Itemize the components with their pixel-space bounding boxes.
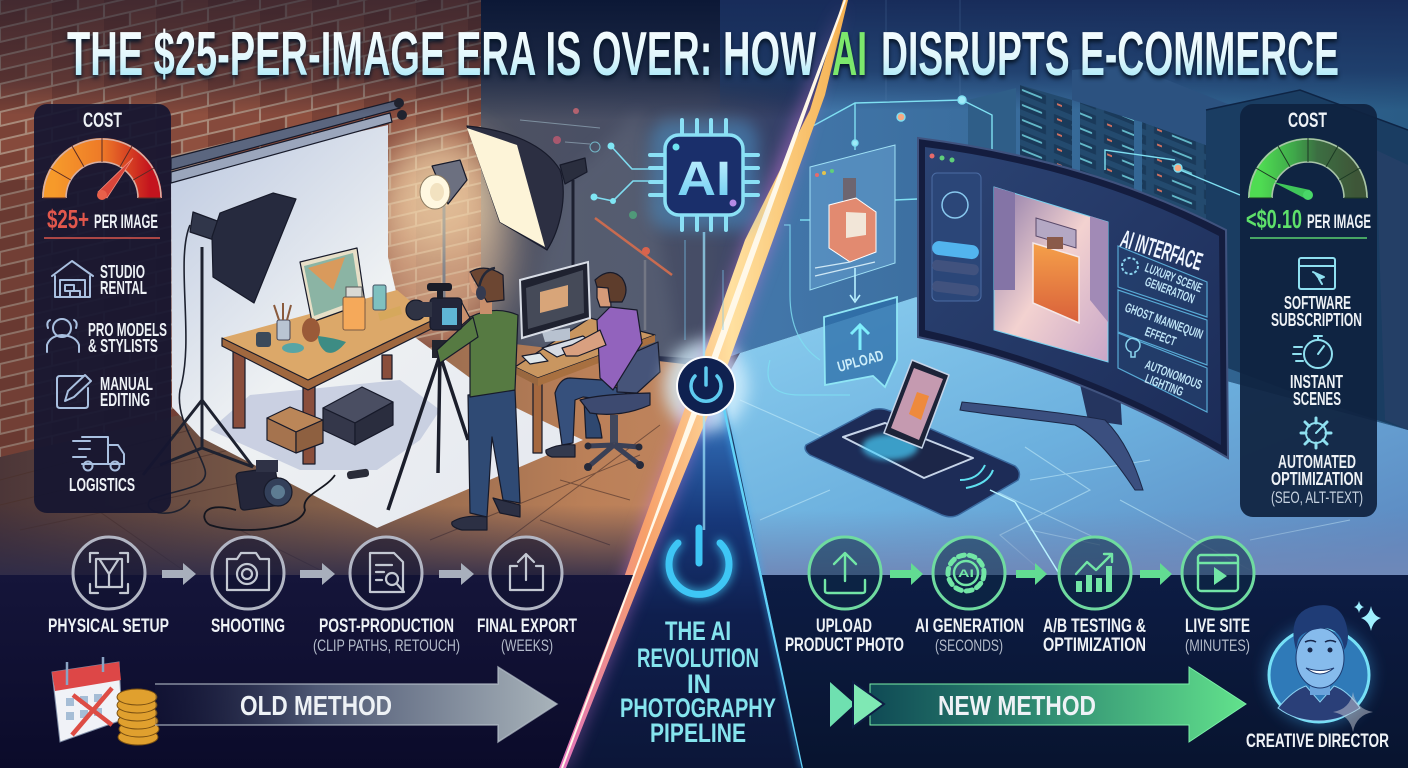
camera on floor	[204, 460, 369, 530]
interface options: LUXURY SCENE	[1143, 260, 1204, 295]
background: AI studio wall	[720, 0, 1408, 430]
old studio scene	[143, 98, 672, 530]
icon: AI chip: AI	[677, 153, 731, 206]
item: pro models and stylists: PRO MODELS	[88, 320, 167, 340]
item: pro models and stylists: & STYLISTS	[88, 336, 158, 356]
step: post-production: POST-PRODUCTION	[319, 616, 454, 637]
background: old studio floor	[0, 340, 735, 575]
title: AI	[832, 20, 867, 89]
step: live site	[1182, 537, 1254, 655]
cost heading: COST	[83, 109, 122, 132]
step: final export: FINAL EXPORT	[477, 616, 577, 637]
step: post-production: (CLIP PATHS, RETOUCH)	[313, 636, 460, 655]
item: instant scenes: SCENES	[1293, 389, 1341, 409]
arrow	[439, 563, 474, 585]
sidebar	[931, 173, 981, 301]
upload bubble: UPLOAD	[836, 347, 886, 376]
old pipeline	[48, 537, 577, 745]
step: shooting	[211, 537, 285, 637]
phone on charging pad	[805, 360, 1060, 575]
background lamp	[385, 135, 495, 300]
centre glow	[664, 340, 748, 432]
new method arrow	[830, 667, 1246, 742]
step: upload product photo: UPLOAD	[816, 616, 872, 637]
divider beam	[558, 0, 848, 768]
cost heading: COST	[1288, 109, 1327, 132]
interface options: EFFECT	[1143, 324, 1178, 349]
table	[222, 290, 433, 464]
item: pro models and stylists	[47, 319, 167, 356]
step: upload product photo	[785, 537, 904, 656]
step: live site: (MINUTES)	[1185, 636, 1250, 655]
step: live site: LIVE SITE	[1185, 616, 1250, 637]
icon: large power symbol	[669, 528, 729, 594]
centre text: IN	[687, 669, 711, 699]
icon: power button	[676, 356, 736, 416]
centre text: REVOLUTION	[637, 643, 759, 673]
icon: AI chip	[590, 120, 758, 230]
step: physical setup	[48, 537, 169, 637]
background: old studio wall	[0, 0, 850, 480]
interface options: GENERATION	[1143, 274, 1197, 306]
wall hud marks	[520, 108, 637, 219]
interface options: LIGHTING	[1143, 371, 1186, 399]
step: AI generation: (SECONDS)	[935, 636, 1003, 655]
curved monitor	[918, 138, 1228, 458]
step: final export: (WEEKS)	[501, 636, 553, 655]
item: studio rental	[52, 261, 147, 298]
backdrop paper	[171, 125, 583, 528]
arrow	[1016, 563, 1047, 585]
interface options	[1117, 225, 1207, 412]
server racks	[968, 65, 1408, 430]
arrow	[1140, 563, 1172, 585]
step: final export	[477, 537, 577, 655]
item: manual editing	[57, 374, 153, 410]
storage case and box	[267, 387, 393, 453]
interface options: AUTONOMOUS	[1143, 357, 1205, 392]
editor at desk	[515, 262, 660, 471]
arrow	[890, 563, 923, 585]
backdrop roller	[171, 98, 407, 183]
step: upload product photo: PRODUCT PHOTO	[785, 635, 904, 656]
creative director avatar	[1246, 601, 1389, 752]
interface options: AI INTERFACE	[1117, 225, 1206, 276]
gauge: high cost	[43, 138, 161, 200]
centre text	[620, 616, 776, 748]
title: THE $25-PER-IMAGE ERA IS OVER: HOW	[67, 20, 816, 89]
step: shooting: SHOOTING	[211, 616, 285, 637]
photographer and tripod	[388, 268, 520, 530]
step: A/B testing: A/B TESTING &	[1043, 616, 1146, 637]
price	[1246, 204, 1371, 234]
item: automated optimization: AUTOMATED	[1278, 452, 1356, 472]
panel: old method cost	[34, 104, 171, 513]
item: automated optimization	[1271, 418, 1363, 507]
centre text: PHOTOGRAPHY	[620, 693, 776, 723]
item: software subscription: SOFTWARE	[1284, 293, 1351, 313]
item: studio rental: STUDIO	[100, 262, 145, 282]
bottom band left	[0, 575, 633, 768]
item: manual editing: MANUAL	[100, 374, 153, 394]
old method arrow: OLD METHOD	[240, 690, 392, 721]
price: $25+	[47, 204, 89, 234]
arrow	[162, 563, 196, 585]
step: physical setup: PHYSICAL SETUP	[48, 616, 169, 637]
old method arrow	[155, 667, 557, 742]
circuit lines	[768, 96, 1240, 395]
price: <$0.10	[1246, 204, 1302, 234]
panel: AI method cost	[1240, 104, 1377, 517]
interface options: GHOST MANNEQUIN	[1123, 300, 1205, 342]
generated scene preview	[994, 187, 1108, 362]
centre wedge	[559, 386, 803, 768]
centre heading block	[620, 528, 776, 748]
softbox light right	[467, 126, 672, 330]
item: instant scenes	[1290, 336, 1343, 409]
softbox light	[143, 193, 296, 513]
item: instant scenes: INSTANT	[1290, 372, 1343, 392]
AI studio scene	[805, 138, 1228, 575]
new method arrow: NEW METHOD	[938, 690, 1096, 721]
centre text: PIPELINE	[650, 718, 746, 748]
step: AI generation	[915, 537, 1024, 655]
icon: crossed calendar and coins	[52, 657, 159, 745]
centre text: THE AI	[665, 616, 731, 646]
background: AI studio floor	[722, 297, 1408, 575]
bottom band right	[762, 575, 1408, 768]
step: AI generation: AI GENERATION	[915, 616, 1024, 637]
item: software subscription	[1271, 258, 1362, 330]
product card	[810, 145, 895, 302]
step: AI generation: AI	[958, 568, 974, 580]
price	[47, 204, 158, 234]
item: studio rental: RENTAL	[100, 278, 147, 298]
item: logistics: LOGISTICS	[69, 475, 135, 495]
step: A/B testing	[1043, 537, 1146, 656]
step: post-production	[313, 537, 460, 655]
new pipeline	[785, 537, 1389, 752]
gauge: low cost	[1249, 138, 1367, 200]
step: A/B testing: OPTIMIZATION	[1043, 635, 1146, 656]
arrow	[300, 563, 335, 585]
item: logistics	[69, 437, 135, 495]
item: manual editing: EDITING	[100, 390, 150, 410]
item: automated optimization: (SEO, ALT-TEXT)	[1271, 488, 1363, 507]
upload bubble	[824, 297, 897, 387]
item: software subscription: SUBSCRIPTION	[1271, 310, 1362, 330]
monitor stand	[960, 380, 1143, 490]
item: automated optimization: OPTIMIZATION	[1271, 469, 1363, 489]
product props on table	[256, 248, 402, 353]
chair base	[584, 415, 644, 471]
top title shade left	[0, 0, 481, 115]
price: PER IMAGE	[94, 212, 158, 233]
